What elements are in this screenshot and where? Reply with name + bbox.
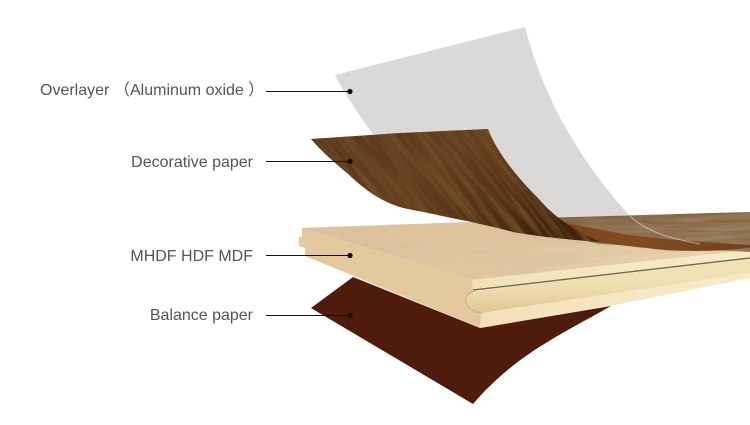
label: Overlayer: [40, 81, 264, 99]
panel: balance paper layer: [311, 277, 611, 404]
panel: decorative paper sheet: [311, 129, 600, 242]
label: Balance paper: Balance paper: [150, 307, 254, 324]
label: Overlayer: （Aluminum oxide ）: [114, 81, 264, 99]
panel: overlayer sheet: [335, 27, 630, 220]
panel: curved dark veneer band: [545, 218, 750, 251]
label: Overlayer: Overlayer: [40, 82, 110, 99]
rounded tongue: [465, 259, 750, 313]
upper lip: [472, 250, 750, 289]
panel: exposed plank surface: [558, 212, 750, 252]
leader: decorative paper: [266, 159, 353, 164]
leader: balance paper: [266, 313, 353, 318]
board top surface: [302, 222, 750, 280]
board end face: [299, 228, 482, 328]
lower lip: [480, 272, 750, 328]
label: Decorative paper: Decorative paper: [131, 154, 254, 171]
leader: overlayer: [266, 89, 353, 94]
panel: MDF board: [299, 215, 750, 328]
tongue end shading: [465, 291, 482, 313]
leader: MDF board: [266, 253, 353, 258]
groove line: [473, 258, 750, 290]
overlay sheet edge: [630, 216, 700, 244]
label: MHDF HDF MDF: MHDF HDF MDF: [130, 248, 253, 265]
